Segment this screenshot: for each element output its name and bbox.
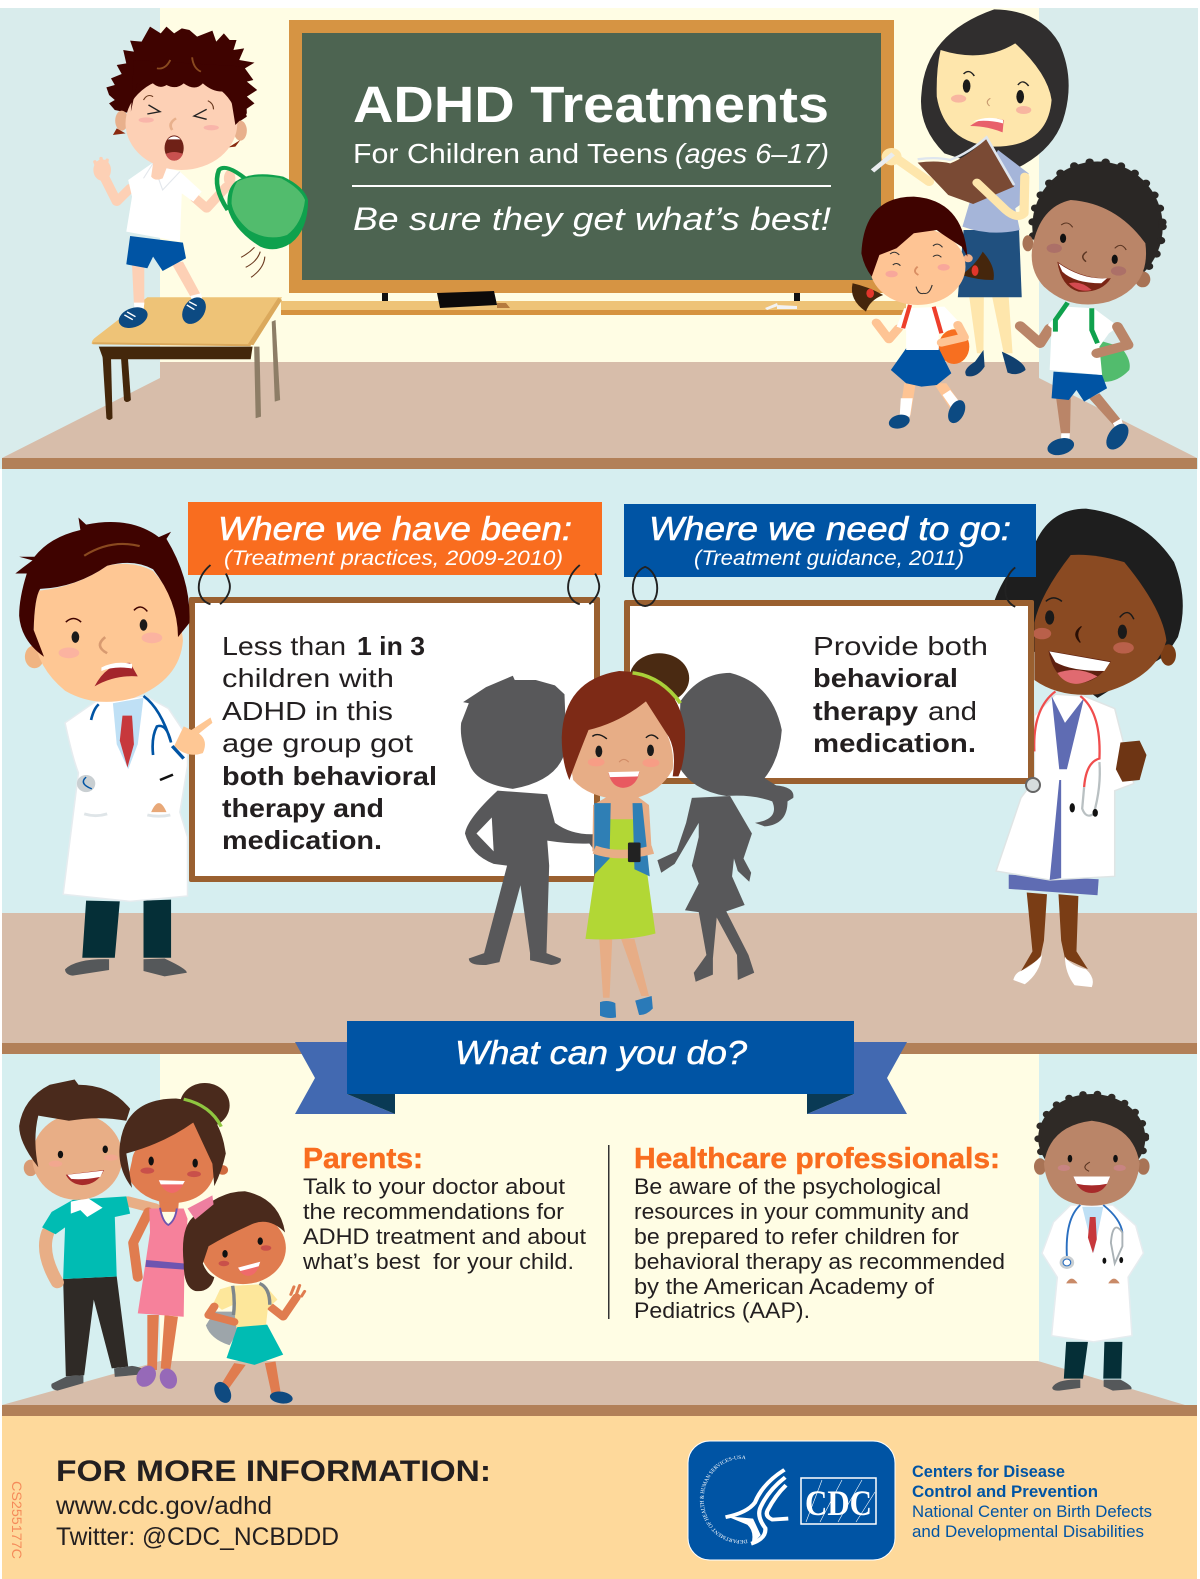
text: agency name xyxy=(912,1462,1152,1541)
character: smiling girl with pigtails xyxy=(852,197,994,431)
character: teen girl with phone xyxy=(562,653,689,1018)
text: treatment guidance: medication. xyxy=(813,728,976,758)
icon: CDC box: CDC xyxy=(805,1483,872,1523)
text: treatment practices statistic: children with xyxy=(222,663,394,693)
text: treatment guidance: and xyxy=(928,696,977,726)
text block: healthcare professionals: resources in your community and xyxy=(634,1199,969,1224)
tagline: Be sure they get what’s best! xyxy=(353,201,831,237)
daughter xyxy=(183,1191,305,1405)
text block: healthcare professionals: behavioral therapy as recommended xyxy=(634,1249,1005,1274)
text block: parents: what’s best for your child. xyxy=(302,1249,574,1274)
panel: what can you do background xyxy=(2,1054,1197,1416)
shirt and arms xyxy=(93,158,235,242)
head xyxy=(106,27,257,170)
text block: parents: the recommendations for xyxy=(303,1199,565,1224)
header: where we have been: Where we have been: xyxy=(218,510,572,547)
links xyxy=(55,1492,339,1551)
mother xyxy=(119,1083,230,1391)
header: where we have been xyxy=(188,502,602,575)
text block: parents: Talk to your doctor about xyxy=(303,1174,566,1199)
ribbon banner: what can you do: What can you do? xyxy=(455,1034,748,1071)
text: treatment practices statistic: both behavioral xyxy=(222,761,437,791)
panel: classroom scene background xyxy=(0,8,1198,469)
ring hooks xyxy=(199,565,599,604)
text: treatment practices statistic: therapy and xyxy=(222,793,384,823)
text block: parents: ADHD treatment and about xyxy=(303,1224,587,1249)
text: treatment practices statistic: Less than xyxy=(222,631,346,661)
text: agency name: Control and Prevention xyxy=(912,1482,1098,1501)
header: where we need to go: Where we need to go: xyxy=(649,510,1011,547)
links: www.cdc.gov/adhd xyxy=(55,1492,272,1520)
links: Twitter: @CDC_NCBDDD xyxy=(56,1523,339,1551)
text block: parents xyxy=(302,1143,587,1274)
text block: healthcare professionals: Be aware of the psychological xyxy=(634,1174,941,1199)
chalkboard with title xyxy=(281,20,906,315)
text: treatment practices statistic xyxy=(222,631,437,855)
header: where we have been: (Treatment practices, 2009-2010) xyxy=(224,547,563,570)
text: agency name: and Developmental Disabilities xyxy=(912,1522,1144,1541)
text: treatment practices statistic: ADHD in this xyxy=(222,696,393,726)
publication code: CS255177C xyxy=(9,1481,24,1559)
silhouette: boy xyxy=(461,676,603,965)
open book xyxy=(918,138,1014,204)
text: treatment guidance: Provide both xyxy=(813,631,988,661)
text: agency name: Centers for Disease xyxy=(912,1462,1065,1481)
header: where we need to go xyxy=(624,504,1036,577)
board: where we have been xyxy=(188,502,602,882)
text block: healthcare professionals: by the American Academy of xyxy=(634,1274,935,1299)
title: ADHD Treatments: ADHD Treatments xyxy=(353,76,829,133)
panel: footer xyxy=(2,1416,1197,1579)
subtitle: (ages 6–17) xyxy=(675,138,829,169)
legs and shoes xyxy=(115,262,211,332)
character: male doctor pointing xyxy=(15,517,212,976)
ring hooks xyxy=(633,567,1015,607)
text: treatment guidance: behavioral xyxy=(813,663,958,693)
header: where we need to go: (Treatment guidance, 2011) xyxy=(694,547,964,570)
text: treatment practices statistic: 1 in 3 xyxy=(357,631,425,661)
subtitle: For Children and Teens xyxy=(353,138,668,169)
text: treatment practices statistic: medication. xyxy=(222,825,382,855)
silhouette: girl with long hair xyxy=(657,673,793,982)
icon: stethoscope ring on female doctor xyxy=(1026,778,1040,792)
character: teacher with book xyxy=(872,9,1069,376)
text: treatment practices statistic: age group got xyxy=(222,728,414,758)
icon: HHS eagle with seal text xyxy=(700,1456,788,1546)
character: angry boy standing on desk xyxy=(92,27,308,420)
father xyxy=(19,1080,155,1391)
text: agency name: National Center on Birth Defects xyxy=(912,1502,1152,1521)
text block: healthcare professionals: be prepared to refer children for xyxy=(634,1224,960,1249)
heading: for more information: FOR MORE INFORMATION: xyxy=(56,1455,491,1488)
text block: healthcare professionals xyxy=(634,1143,1005,1323)
text block: parents: Parents: xyxy=(303,1143,423,1175)
shorts xyxy=(126,236,186,271)
board: where we need to go xyxy=(624,504,1036,784)
character: smiling boy with green backpack xyxy=(1020,162,1163,458)
icon: HHS eagle with seal text: DEPARTMENT OF HEALTH & HUMAN SERVICES-USA xyxy=(700,1456,748,1544)
character: female doctor xyxy=(994,509,1183,987)
character: family of three xyxy=(19,1080,305,1405)
logo: HHS and CDC xyxy=(688,1440,896,1560)
desk xyxy=(92,297,282,420)
text: treatment guidance xyxy=(813,631,988,758)
text block: healthcare professionals: Healthcare professionals: xyxy=(634,1143,1000,1175)
text block: healthcare professionals: Pediatrics (AAP). xyxy=(634,1298,810,1323)
panel: where we are and where we need to go background xyxy=(2,469,1197,1054)
green backpack being swung xyxy=(217,168,308,277)
subtitle xyxy=(353,138,829,169)
text: treatment guidance: therapy xyxy=(813,696,919,726)
ribbon banner: what can you do xyxy=(295,1021,907,1114)
character: small doctor xyxy=(1034,1094,1150,1391)
